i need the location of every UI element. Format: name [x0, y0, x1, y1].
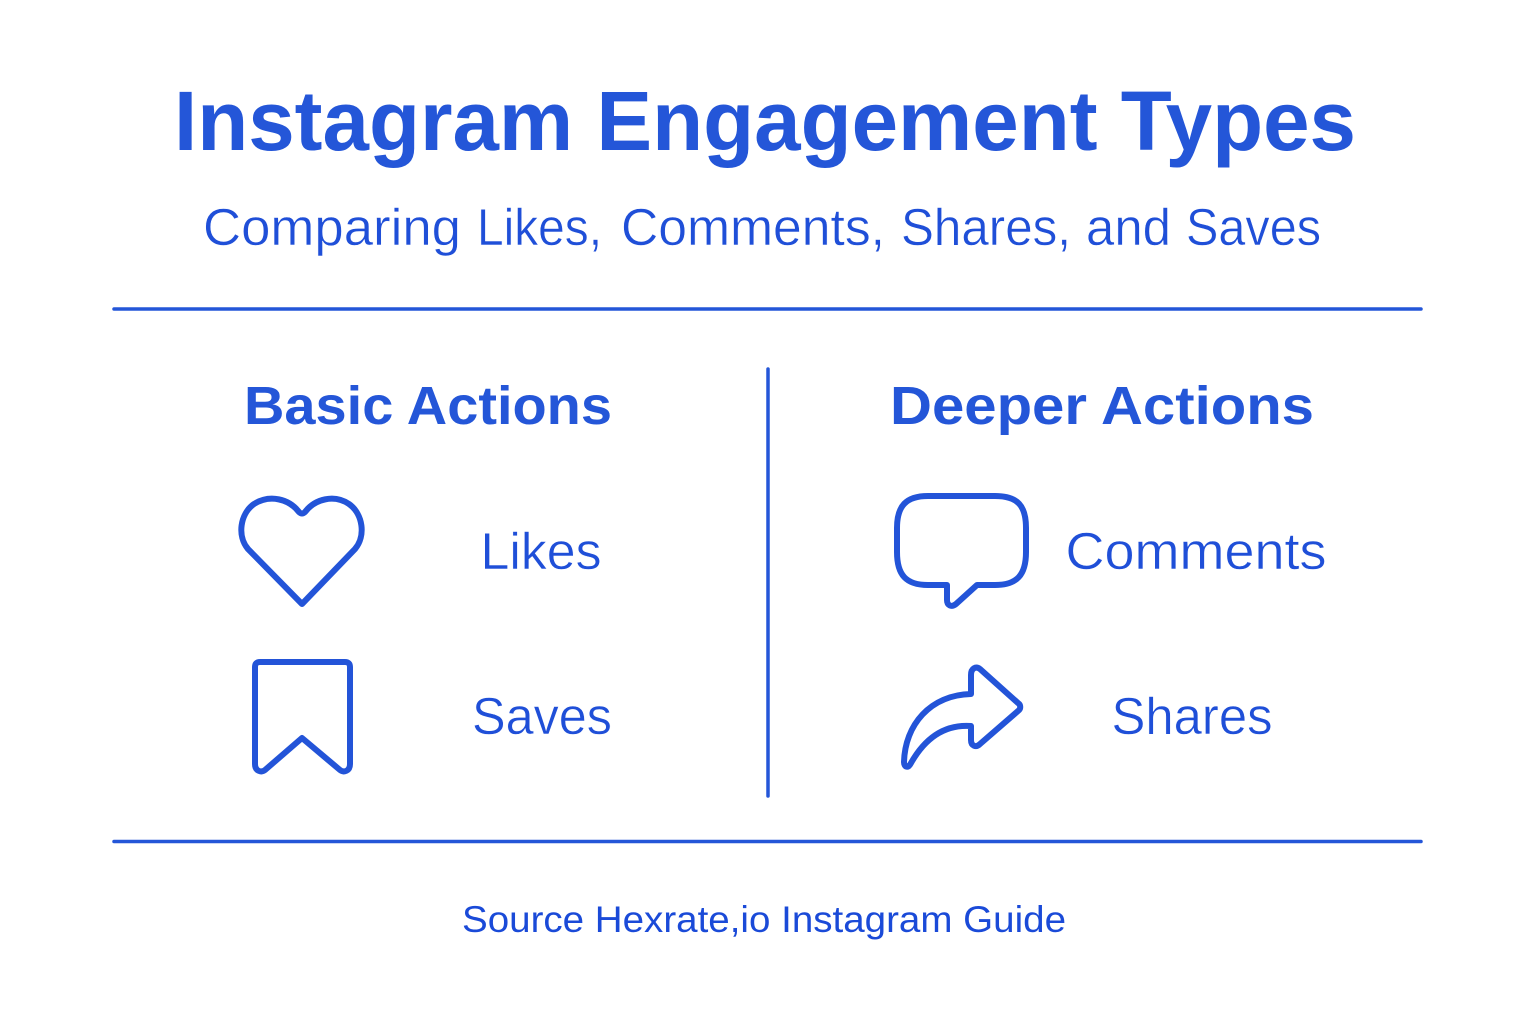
heading: deeper actions: Deeper Actions — [890, 376, 1314, 436]
label: likes: Likes — [480, 523, 602, 581]
subtitle — [203, 199, 1321, 257]
subtitle: Comparing — [203, 199, 461, 257]
label: comments: Comments — [1066, 523, 1326, 581]
subtitle: Shares, — [901, 199, 1071, 257]
icon: speech bubble — [897, 496, 1026, 606]
icon: share arrow — [904, 668, 1020, 767]
heading: basic actions: Basic Actions — [244, 376, 612, 436]
subtitle: and — [1086, 199, 1171, 257]
panel: deeper actions — [890, 376, 1326, 767]
icon: heart — [241, 499, 362, 604]
icon: bookmark — [255, 662, 350, 771]
subtitle: Comments, — [621, 199, 885, 257]
subtitle: Likes, — [477, 199, 602, 257]
subtitle: Saves — [1186, 199, 1321, 257]
panel: basic actions — [241, 376, 612, 771]
label: shares: Shares — [1112, 688, 1272, 746]
title: Instagram Engagement Types — [174, 74, 1356, 168]
source note: Source Hexrate,io Instagram Guide — [462, 899, 1066, 940]
label: saves: Saves — [472, 688, 612, 746]
